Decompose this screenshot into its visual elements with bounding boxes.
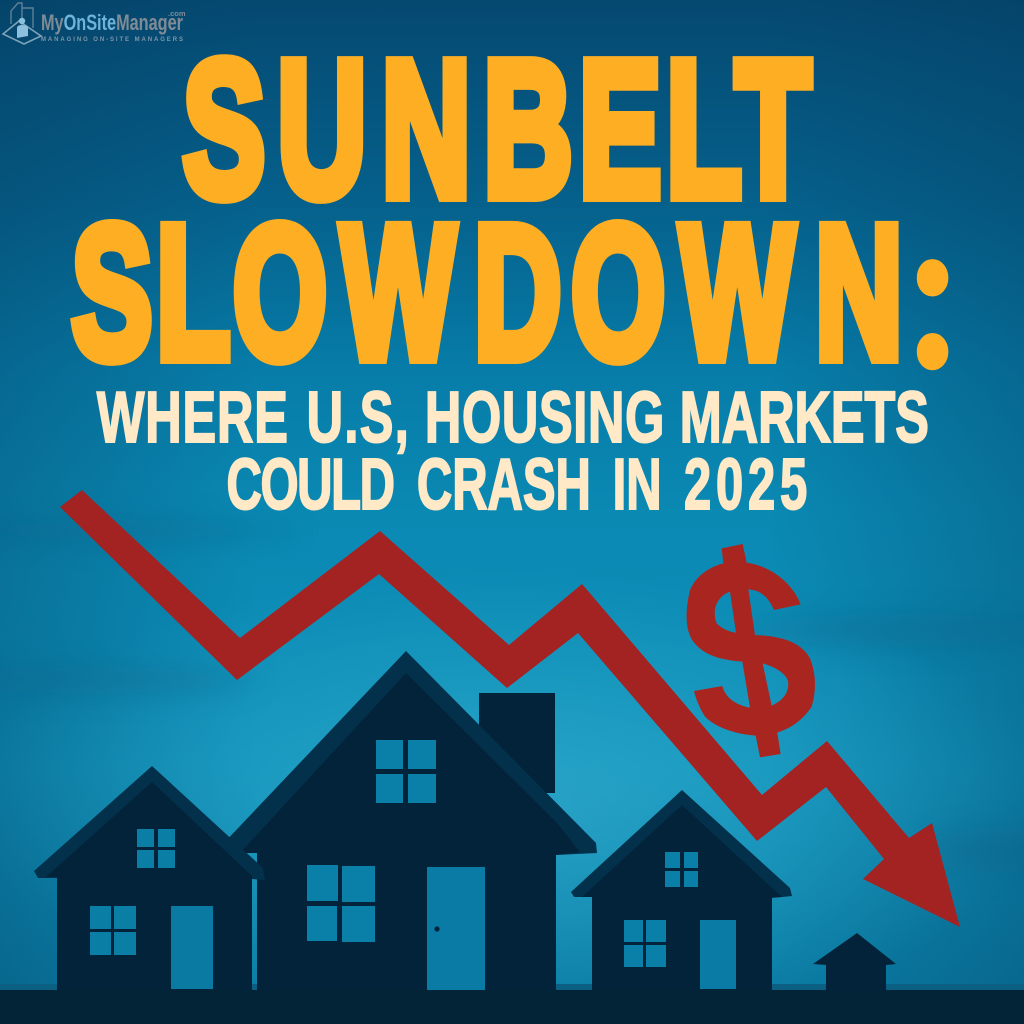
title line 1: SUNBELT — [183, 22, 811, 237]
right house upper window — [665, 852, 698, 887]
center house door — [427, 867, 485, 990]
icon: dollar sign — [687, 544, 815, 757]
center house upper window — [376, 740, 436, 803]
center house chimney — [479, 693, 555, 793]
title colon: : — [901, 163, 966, 418]
subtitle line 1: U.S, — [307, 378, 426, 458]
subtitle line 2: CRASH — [417, 445, 604, 525]
subtitle line 1: WHERE — [97, 378, 303, 458]
subtitle line 2: COULD — [226, 445, 406, 525]
left house upper window — [137, 829, 175, 868]
center house door knob — [434, 926, 440, 932]
logo tagline: MANAGING ON-SITE MANAGERS — [41, 37, 183, 43]
right house lower window — [624, 920, 666, 967]
ground — [0, 990, 1024, 1024]
center house lower window — [307, 865, 375, 942]
logo icon — [3, 3, 41, 44]
logo .com: .com — [168, 9, 186, 18]
logo wordmark: MyOnSiteManager — [41, 10, 183, 35]
house: left — [34, 766, 265, 990]
left house door — [171, 906, 213, 989]
falling red arrow — [60, 490, 960, 927]
house: small — [813, 933, 896, 992]
horizon band — [0, 984, 1024, 992]
subtitle line 2: IN — [613, 445, 675, 525]
title line 2: SLOWDOWN — [72, 186, 903, 398]
logo: MyOnSiteManager — [3, 3, 186, 44]
subtitle line 1: HOUSING — [425, 378, 680, 458]
subtitle line 1: MARKETS — [680, 378, 929, 458]
house: right — [571, 790, 792, 990]
left house lower window — [90, 906, 136, 955]
right house door — [700, 920, 736, 989]
house: center — [222, 651, 597, 990]
subtitle line 2: 2025 — [684, 445, 812, 525]
